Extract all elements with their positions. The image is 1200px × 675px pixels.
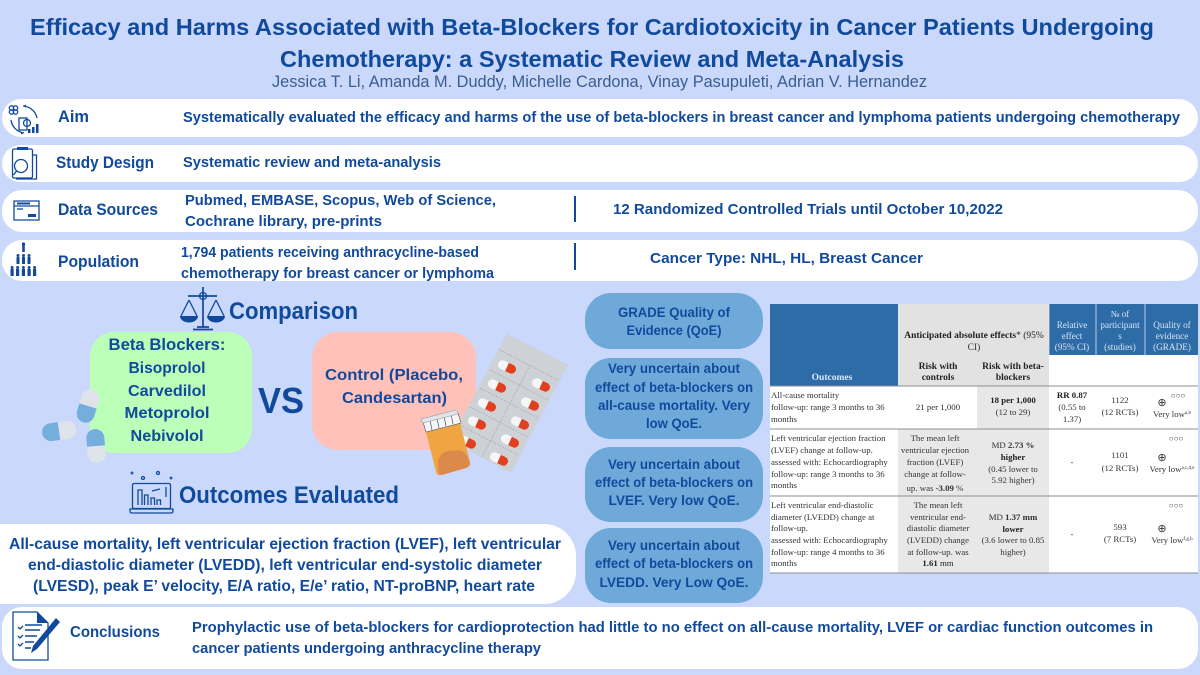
row: lvedd: Left ventricular end-diastolic (771, 500, 874, 510)
panel: conclusions (2, 607, 1198, 669)
conclusions text (192, 619, 1153, 657)
table header: (GRADE) (1153, 342, 1191, 352)
panel: grade mortality: all-cause mortality. Very (598, 398, 750, 413)
population text (181, 244, 495, 282)
row: lvedd: ○○○ (1169, 501, 1183, 510)
row: lvef: months (771, 480, 797, 490)
panel: grade lvef: effect of beta-blockers on (595, 475, 753, 490)
row: lvedd: 1.61 mm (922, 558, 954, 568)
row: lvedd (771, 500, 1193, 568)
panel: beta blockers: Carvedilol (128, 383, 206, 400)
table header: evidence (1156, 331, 1188, 341)
study design label: Study Design (56, 153, 154, 172)
panel: grade heading: GRADE Quality of (618, 305, 730, 320)
row: lvedd: follow-up. (771, 523, 808, 533)
panel: grade lvef: Very uncertain about (608, 457, 740, 472)
population text: chemotherapy for breast cancer or lymphoma (181, 265, 495, 282)
panel: control (312, 332, 476, 450)
row: all-cause mortality: Very low (1153, 409, 1185, 419)
row: all-cause mortality: ⊕ (1157, 397, 1167, 409)
row: all-cause mortality: 1122 (1111, 395, 1129, 405)
icon: aim research cycle (9, 104, 39, 134)
panel: grade heading (585, 293, 763, 349)
table header: Outcomes (812, 373, 853, 383)
icon: capsules (41, 387, 106, 464)
row: lvef: higher (1001, 452, 1025, 462)
table header: blockers (996, 373, 1030, 383)
icon: clipboard with magnifier (12, 147, 36, 179)
row: lvedd: (3.6 lower to 0.85 (982, 535, 1045, 545)
panel: outcomes evaluated: All-cause mortality, left ventricular ejection fraction (LVEF), left ventricular (9, 536, 561, 553)
row: lvedd: ⊕ (1157, 523, 1167, 535)
row: lvef (771, 433, 1195, 493)
conclusions text: Prophylactic use of beta-blockers for cardioprotection had little to no effect on all-cause mortality, LVEF or cardiac function outcomes in (192, 619, 1153, 636)
table header: s (1118, 331, 1122, 341)
table header (812, 309, 1192, 383)
row: lvedd: The mean left (914, 500, 963, 510)
study design text: Systematic review and meta-analysis (183, 154, 441, 171)
row: all-cause mortality: ○○○ (1171, 391, 1185, 400)
conclusions label: Conclusions (70, 624, 160, 641)
panel: outcomes evaluated: (LVESD), peak E’ velocity, E/A ratio, E/e’ ratio, NT-proBNP, heart rate (33, 578, 535, 595)
panel: grade lvedd: effect of beta-blockers on (595, 556, 753, 571)
trials text: 12 Randomized Controlled Trials until October 10,2022 (613, 201, 1003, 218)
panel: grade lvedd: LVEDD. Very Low QoE. (600, 575, 748, 590)
table header: Risk with (919, 362, 958, 372)
row: all-cause mortality (771, 390, 1191, 424)
title: Chemotherapy: a Systematic Review and Meta-Analysis (280, 46, 904, 72)
row: all-cause mortality: 1.37) (1063, 414, 1081, 424)
conclusions text: cancer patients undergoing anthracycline therapy (192, 640, 542, 657)
row: lvedd: - (1071, 529, 1074, 539)
panel: beta blockers: Beta Blockers: (108, 336, 226, 354)
title (30, 14, 1154, 72)
panel: outcomes evaluated: end-diastolic diameter (LVEDD), left ventricular end-systolic diameter (28, 557, 542, 574)
row: lvedd: follow-up: range 4 months to 36 (771, 547, 885, 557)
row: lvef: Very low (1150, 464, 1182, 474)
row: lvef: fraction (LVEF) (907, 457, 963, 467)
panel: grade mortality: low QoE. (646, 416, 702, 431)
panel: grade mortality (585, 358, 763, 439)
row: lvedd: higher) (1000, 547, 1026, 557)
population label: Population (58, 252, 139, 271)
panel: aim (2, 99, 1198, 137)
icon: people pyramid (10, 242, 36, 276)
table header: CI) (968, 342, 980, 353)
row: lvedd: diastolic diameter (907, 523, 969, 533)
row: lvef: ventricular ejection (901, 445, 970, 455)
data sources text (185, 192, 496, 230)
panel: beta blockers: Nebivolol (130, 428, 204, 445)
panel: beta blockers: Metoprolol (124, 405, 210, 422)
panel: study design (2, 145, 1198, 182)
row: all-cause mortality: RR 0.87 (1057, 390, 1088, 400)
table header: participant (1100, 320, 1140, 330)
panel: grade mortality: effect of beta-blockers on (595, 380, 753, 395)
row: all-cause mortality: months (771, 414, 797, 424)
row: all-cause mortality: (0.55 to (1058, 402, 1086, 412)
row: lvef: (0.45 lower to (988, 464, 1038, 474)
row: lvedd: months (771, 558, 797, 568)
aim label: Aim (58, 107, 89, 126)
panel: beta blockers (90, 332, 252, 453)
row: all-cause mortality: (12 RCTs) (1102, 407, 1138, 417)
row: lvef: MD 2.73 % (992, 440, 1034, 450)
row: lvef: (12 RCTs) (1102, 463, 1138, 473)
panel: beta blockers: Bisoprolol (128, 360, 206, 377)
row: all-cause mortality: follow-up: range 3 months to 36 (771, 402, 885, 412)
table header: № of (1111, 309, 1130, 319)
panel: grade lvef: LVEF. Very low QoE. (608, 493, 740, 508)
table header: (95% CI) (1055, 342, 1089, 352)
panel: grade heading: Evidence (QoE) (626, 323, 722, 338)
table header: Anticipated absolute effects* (95% (904, 330, 1044, 341)
panel: grade lvedd: Very uncertain about (608, 538, 740, 553)
row: lvedd: 593 (1113, 522, 1127, 532)
row: lvef: Left ventricular ejection fraction (771, 433, 886, 443)
row: lvef: assessed with: Echocardiography (771, 457, 888, 467)
row: lvedd: Very low (1151, 535, 1183, 545)
row: lvef: The mean left (911, 433, 960, 443)
authors: Jessica T. Li, Amanda M. Duddy, Michelle Cardona, Vinay Pasupuleti, Adrian V. Hernandez (272, 73, 927, 91)
table header: Relative (1057, 320, 1087, 330)
table header: effect (1062, 331, 1083, 341)
row: lvedd: ventricular end- (910, 512, 966, 522)
row: lvedd: MD 1.37 mm (989, 512, 1038, 522)
row: lvef: (LVEF) change at follow-up. (771, 445, 873, 455)
icon: folder (14, 201, 39, 220)
panel: grade lvedd (585, 528, 763, 603)
panel: grade lvef (585, 447, 763, 522)
icon: laptop with chart (130, 472, 173, 513)
panel: control: Control (Placebo, (325, 367, 463, 384)
panel: outcomes evaluated (0, 524, 576, 604)
table header: Quality of (1153, 320, 1192, 330)
panel: grade mortality: Very uncertain about (608, 361, 740, 376)
table header: controls (922, 373, 955, 383)
row: lvedd: f,g,h (1183, 537, 1193, 542)
panel: data sources (2, 190, 1198, 232)
population text: 1,794 patients receiving anthracycline-based (181, 244, 479, 261)
row: lvef: follow-up: range 3 months to 36 (771, 469, 885, 479)
row: lvef: ○○○ (1169, 434, 1183, 443)
icon: pill bottle (421, 410, 470, 475)
table: grade evidence summary (770, 304, 1198, 573)
icon: blister pack (450, 334, 568, 473)
table header: Risk with beta- (982, 362, 1044, 372)
icon: balance scale (180, 287, 225, 330)
data sources text: Cochrane library, pre-prints (185, 213, 382, 230)
table header: (studies) (1104, 342, 1136, 352)
row: lvef: ⊕ (1157, 452, 1167, 464)
row: lvedd: (LVEDD) change (907, 535, 969, 545)
row: all-cause mortality: All-cause mortality (771, 390, 840, 400)
aim text: Systematically evaluated the efficacy and harms of the use of beta-blockers in breast cancer and lymphoma patients undergoing chemotherapy (183, 109, 1181, 126)
row: all-cause mortality: 18 per 1,000 (990, 395, 1036, 405)
outcomes heading: Outcomes Evaluated (179, 482, 399, 509)
panel: population (2, 240, 1198, 282)
row: lvedd: at follow-up. was (907, 547, 969, 557)
row: lvef: change at follow- (904, 469, 966, 479)
row: lvedd: lower (1002, 524, 1024, 534)
cancer type text: Cancer Type: NHL, HL, Breast Cancer (650, 250, 923, 267)
row: lvef: a,c,d,e (1182, 466, 1195, 471)
row: lvedd: assessed with: Echocardiography (771, 535, 888, 545)
data sources label: Data Sources (58, 200, 158, 219)
vs label: VS (258, 380, 304, 421)
data sources text: Pubmed, EMBASE, Scopus, Web of Science, (185, 192, 496, 209)
title: Efficacy and Harms Associated with Beta-Blockers for Cardiotoxicity in Cancer Patients Undergoing (30, 14, 1154, 40)
panel: control: Candesartan) (342, 390, 447, 407)
row: lvedd: diameter (LVEDD) change at (771, 512, 875, 522)
row: all-cause mortality: a,b (1185, 411, 1191, 416)
row: lvef: 1101 (1111, 450, 1129, 460)
row: all-cause mortality: (12 to 29) (996, 407, 1030, 417)
comparison heading: Comparison (229, 298, 358, 325)
row: lvef: up. was -3.09 % (907, 483, 964, 493)
row: lvedd: (7 RCTs) (1104, 534, 1136, 544)
row: lvef: 5.92 higher) (992, 475, 1035, 485)
row: all-cause mortality: 21 per 1,000 (916, 402, 961, 412)
row: lvef: - (1071, 457, 1074, 467)
icon: checklist and pen (13, 612, 60, 660)
